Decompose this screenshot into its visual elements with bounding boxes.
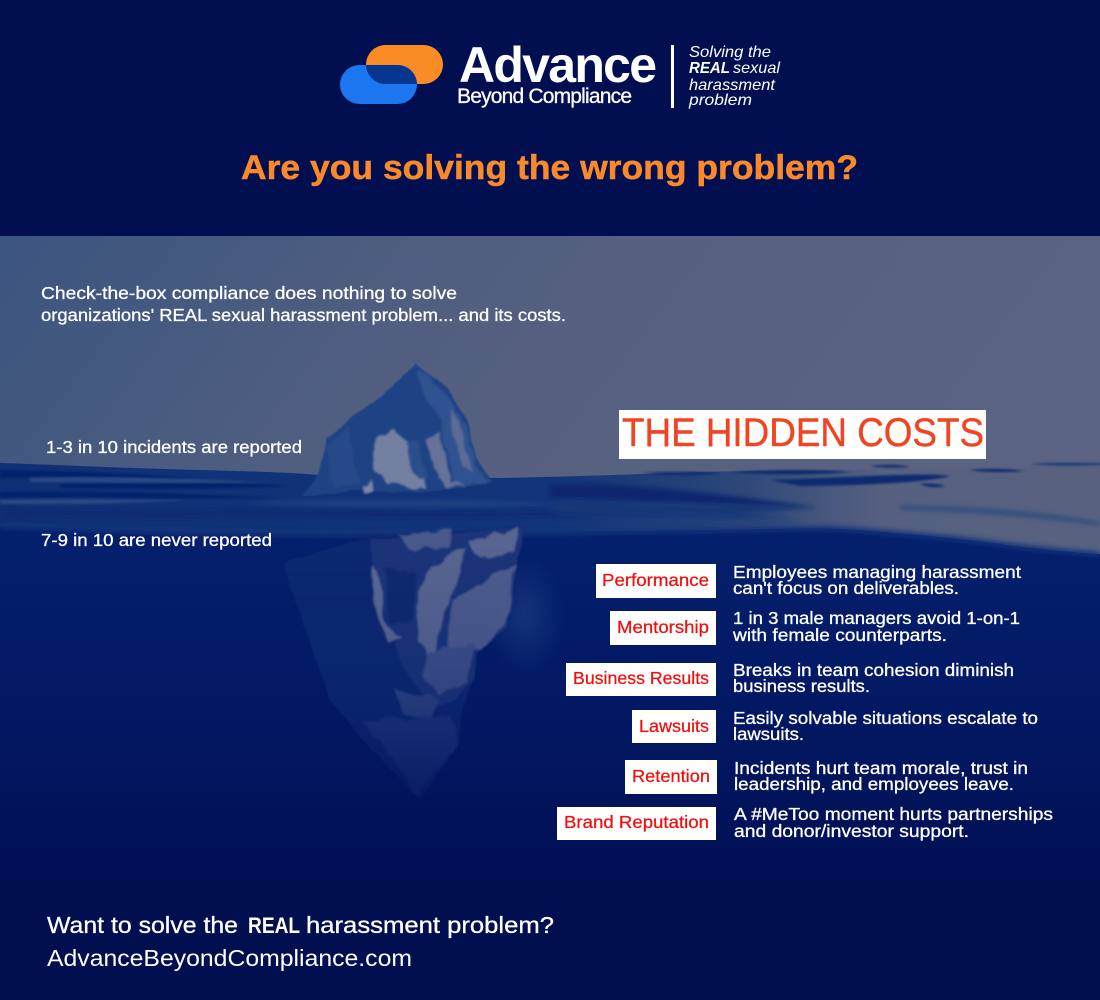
footer call to action	[47, 912, 554, 971]
cost: mentorship: with female counterparts.	[732, 625, 947, 645]
cost: performance	[596, 562, 1021, 598]
cost: business results: Business Results	[573, 668, 709, 688]
surface band: centre dark	[0, 508, 820, 518]
label: unreported incidents: 7-9 in 10 are never reported	[41, 530, 272, 550]
cost: brand reputation: Brand Reputation	[564, 812, 709, 832]
cost: retention: Retention	[632, 766, 710, 786]
footer call to action: Want to solve the	[47, 912, 238, 938]
cost: brand reputation	[557, 804, 1053, 841]
cost: performance: Performance	[602, 570, 709, 590]
iceberg above water	[302, 364, 492, 497]
logo tagline: problem	[688, 92, 752, 109]
logo tagline: REAL	[689, 60, 730, 77]
logo wordmark: Advance	[459, 37, 657, 93]
cost: business results	[566, 660, 1014, 696]
water surface band	[0, 463, 1100, 560]
logo tagline: harassment	[689, 77, 776, 94]
water edge softening	[0, 526, 1100, 554]
right soft shadow	[900, 505, 1100, 526]
underwater base	[285, 530, 478, 773]
label: reported incidents: 1-3 in 10 incidents are reported	[46, 437, 302, 457]
logo tagline: Solving the	[689, 44, 771, 61]
cost: brand reputation: A #MeToo moment hurts partnerships	[734, 804, 1053, 824]
surface streaks: light left	[0, 477, 260, 504]
logo subtitle: Beyond Compliance	[457, 85, 632, 108]
light glow under water	[485, 555, 565, 675]
heading: the hidden costs: THE HIDDEN COSTS	[622, 411, 984, 455]
logo tagline	[688, 44, 780, 109]
logo tagline: sexual	[733, 60, 780, 77]
panel: hidden costs list	[557, 562, 1053, 841]
dark wedge right	[550, 484, 815, 507]
horizon ripples right	[640, 465, 1025, 487]
footer call to action: AdvanceBeyondCompliance.com	[47, 945, 412, 971]
title: Are you solving the wrong problem?	[241, 149, 858, 187]
footer call to action: REAL	[248, 914, 300, 938]
intro text: organizations' REAL sexual harassment problem... and its costs.	[41, 305, 566, 325]
cost: lawsuits	[632, 708, 1038, 744]
cost: lawsuits: lawsuits.	[733, 724, 804, 744]
underwater mid	[370, 527, 525, 710]
cost: lawsuits: Easily solvable situations escalate to	[733, 708, 1038, 728]
cost: retention: leadership, and employees leave.	[734, 774, 1014, 794]
deep water	[0, 526, 1100, 882]
cost: brand reputation: and donor/investor support.	[734, 821, 969, 841]
berg silhouette	[302, 364, 492, 497]
intro text	[41, 283, 566, 325]
cost: performance: can't focus on deliverables.	[733, 578, 959, 598]
cost: mentorship: Mentorship	[617, 617, 709, 637]
cost: retention: Incidents hurt team morale, trust in	[734, 758, 1028, 778]
cost: retention	[625, 758, 1028, 794]
logo divider	[671, 45, 674, 108]
cost: business results: Breaks in team cohesion diminish	[733, 660, 1014, 680]
underwater highlights	[364, 526, 520, 764]
surface streaks: left	[0, 470, 290, 499]
logo	[340, 45, 780, 108]
cost: performance: Employees managing harassment	[733, 562, 1021, 582]
cost: business results: business results.	[733, 676, 870, 696]
iceberg below water	[283, 527, 525, 800]
intro text: Check-the-box compliance does nothing to solve	[41, 283, 457, 303]
sky	[0, 236, 1100, 526]
cost: mentorship: 1 in 3 male managers avoid 1-on-1	[733, 608, 1020, 628]
logo icon	[340, 45, 443, 104]
top band	[0, 0, 1100, 236]
footer call to action: harassment problem?	[306, 912, 554, 938]
cost: mentorship	[610, 608, 1020, 645]
bottom band	[0, 882, 1100, 1000]
surface band: centre light	[240, 499, 560, 508]
panel: iceberg scene	[0, 236, 1100, 882]
cost: lawsuits: Lawsuits	[639, 716, 709, 736]
